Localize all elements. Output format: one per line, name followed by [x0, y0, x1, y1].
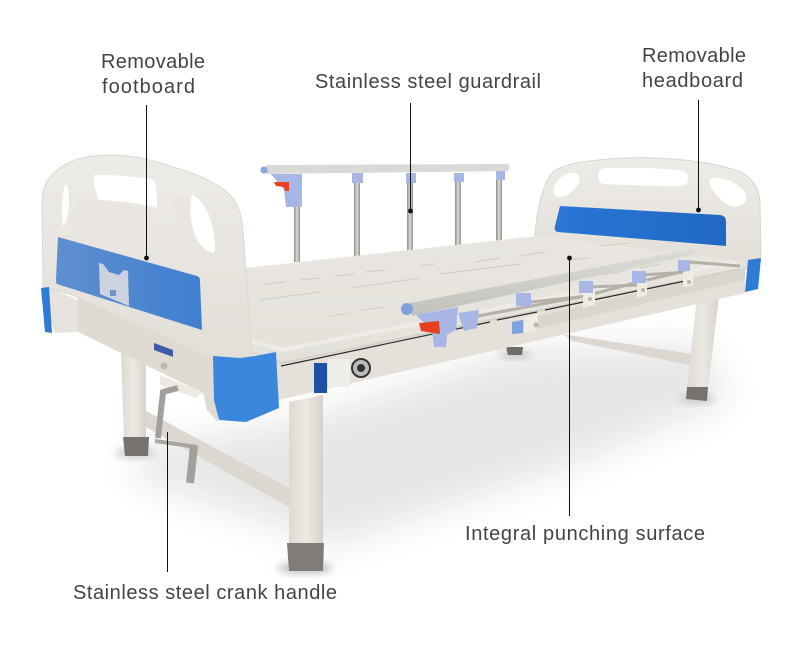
footboard holes: [62, 175, 215, 253]
front clamps: [416, 260, 690, 347]
callout: removable footboard: [101, 51, 205, 260]
footboard: [41, 155, 279, 422]
front leg: [287, 395, 324, 571]
rear guardrail: [260, 164, 510, 262]
perforations: [260, 243, 660, 316]
card holder clip: [99, 263, 129, 306]
handle shading: [171, 195, 210, 258]
round badge: [352, 359, 370, 377]
crank handle: [155, 388, 197, 483]
callout: stainless steel guardrail: Stainless steel guardrail: [315, 71, 541, 93]
callout: removable headboard: [642, 45, 746, 212]
front guardrail: [401, 249, 740, 347]
callout: removable footboard: Removable: [101, 51, 205, 73]
front guardrail bar: [410, 249, 697, 316]
left blue strip: [41, 287, 52, 333]
black slot: [281, 280, 690, 366]
far left foot: [506, 347, 523, 355]
callout: integral punching surface: Integral punching surface: [465, 523, 705, 545]
brand label: [314, 359, 370, 393]
guardrail bar: [266, 164, 510, 174]
front blue corner: [213, 352, 279, 422]
right leg and crossbar: [563, 296, 719, 401]
headboard: [535, 158, 761, 292]
callout: removable headboard: headboard: [642, 70, 743, 92]
struts: [478, 262, 740, 316]
right blue corner: [745, 258, 761, 292]
guardrail clamps: [271, 171, 505, 207]
floor shadow: [115, 345, 730, 574]
bracket screws: [534, 280, 691, 328]
footboard blue panel: [56, 237, 202, 330]
red latch: [419, 321, 440, 334]
side rail below platform: [275, 268, 745, 400]
footboard apron and left skirt: [43, 285, 218, 422]
callout: stainless steel crank handle: Stainless steel crank handle: [73, 582, 337, 604]
guardrail posts: [294, 178, 502, 262]
platform surface: [245, 236, 748, 366]
callout: removable headboard: Removable: [642, 45, 746, 67]
callout: stainless steel guardrail: [315, 71, 541, 213]
left rear leg and crossbar: [121, 353, 289, 507]
label plate: [154, 343, 173, 357]
callout: removable footboard: footboard: [102, 76, 195, 98]
callout: integral punching surface: [465, 256, 705, 545]
red latch: [274, 182, 289, 191]
crank bracket: [160, 375, 203, 398]
headboard holes: [554, 168, 746, 207]
headboard blue panel: [555, 206, 726, 246]
rail end block: [512, 320, 523, 334]
hinge brackets: [524, 270, 693, 333]
